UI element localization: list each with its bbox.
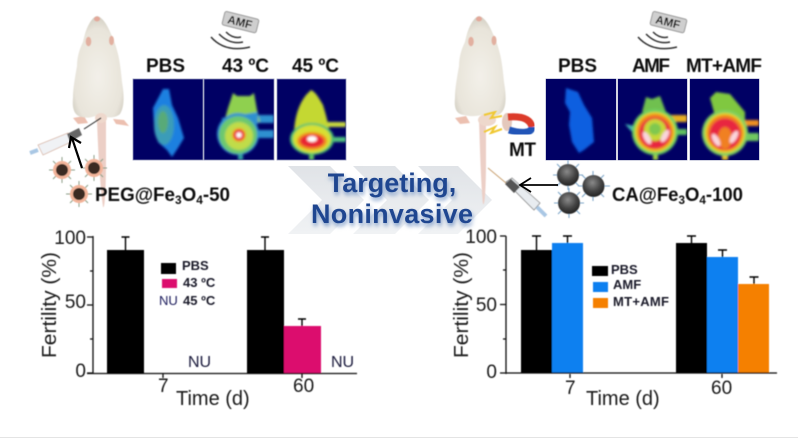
left x axis labels: 7 [158,376,169,397]
left axes [87,236,357,378]
left nanoparticle label: 4 [196,193,203,207]
right axis tick labels [465,227,497,383]
left nanoparticle label: O [182,185,196,206]
right AMF icon: AMF [654,14,681,32]
thermal image: right AMF [618,79,687,160]
thermal image: right MT+AMF [690,79,759,160]
right panel headings: MT+AMF [686,56,762,77]
thermal image: right PBS [546,79,616,160]
right y axis title: Fertility (%) [451,252,473,358]
left nanoparticle label: 3 [175,193,182,207]
left NU labels: NU [188,354,211,371]
right panel headings: PBS [558,56,597,77]
central title [311,168,474,232]
central title: Targeting, [329,171,457,201]
right syringe [488,168,546,216]
left x axis labels: 60 [293,376,314,397]
left x axis labels [158,376,314,410]
magnet [484,112,532,133]
thermal image: left PBS [133,79,203,160]
left x axis labels: Time (d) [176,388,250,410]
left axis tick labels: 50 [65,292,86,313]
right panel headings [558,56,762,77]
left panel headings: 45 ºC [292,56,339,77]
right axis tick labels: 50 [476,295,497,316]
thermal image: left 43 C [204,79,274,160]
right nanoparticle label: CA@Fe [612,185,680,206]
left AMF icon [211,11,259,49]
thermal panel frames [133,79,759,160]
central chevron arrow [288,166,492,234]
right nanoparticle label: 3 [678,193,685,207]
left bars [107,237,321,373]
right x axis labels [565,378,732,410]
left AMF icon: AMF [226,14,253,32]
left panel headings: 43 ºC [222,56,269,77]
left axis tick labels: 100 [54,228,86,249]
central title: Noninvasive [312,202,474,232]
right AMF icon [638,11,687,49]
left nanoparticles [49,155,107,207]
left NU labels: NU [331,354,354,371]
right x axis labels: 7 [565,378,576,399]
left legend: PBS [182,258,209,273]
left axis tick labels [54,228,86,382]
left legend [159,258,216,308]
left NU labels [188,354,354,371]
right legend: AMF [613,277,641,292]
right nanoparticle label: -100 [706,185,743,206]
right nanoparticle label: 4 [699,193,706,207]
right panel headings: AMF [632,56,670,77]
left legend: 45 ºC [183,293,216,308]
left bar chart [39,228,357,410]
MT label: MT [509,140,536,161]
right nanoparticles [553,160,610,218]
right bar chart [451,227,777,410]
left syringe [30,118,101,155]
left legend: NU [159,293,178,308]
left nanoparticle label: PEG@Fe [95,185,176,206]
right mouse [455,16,512,204]
central title: Noninvasive [311,199,473,229]
left legend: 43 ºC [183,275,216,290]
left nanoparticle label: -50 [203,185,230,206]
left axis tick labels: 0 [75,361,86,382]
right x axis labels: 60 [711,378,732,399]
right legend: PBS [611,262,638,277]
left panel headings: PBS [146,56,185,77]
right axes [500,236,777,378]
right legend: MT+AMF [613,294,669,309]
left arrow [69,137,82,168]
central title: Targeting, [328,168,456,198]
right axis tick labels: 0 [486,362,497,383]
left panel headings [146,56,339,77]
right x axis labels: Time (d) [586,388,660,410]
right legend [592,262,669,309]
right bars [521,236,769,373]
thermal image: left 45 C [277,79,346,160]
left mouse [73,16,129,207]
left y axis title: Fertility (%) [39,252,61,358]
right axis tick labels: 100 [465,227,497,248]
right nanoparticle label: O [685,185,699,206]
right arrow [520,178,558,192]
